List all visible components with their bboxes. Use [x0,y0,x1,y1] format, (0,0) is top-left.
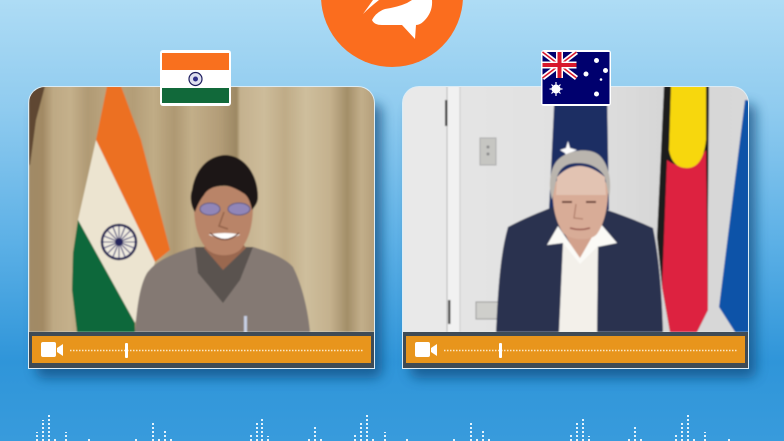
icon: camera [415,342,437,357]
panel: Australia video call [402,86,756,378]
jacket [496,207,663,332]
audio equalizer dots [37,413,729,441]
hair [191,155,258,212]
face [552,180,609,238]
flags behind [548,106,610,212]
logo: orange circle with speech bubbles [321,0,463,67]
glasses [200,203,220,215]
video control bar [29,332,374,368]
icon: India flag badge [160,50,231,106]
icon: camera [41,342,63,357]
icon: Australia flag badge [541,50,611,106]
video control bar [403,332,748,368]
face [194,186,253,255]
photo: Australian minister with flags [403,86,749,332]
hair [550,150,610,200]
shirt [135,247,310,332]
panel: India video call [28,86,382,378]
photo: Indian minister with flag [29,86,375,332]
neck [565,234,592,258]
